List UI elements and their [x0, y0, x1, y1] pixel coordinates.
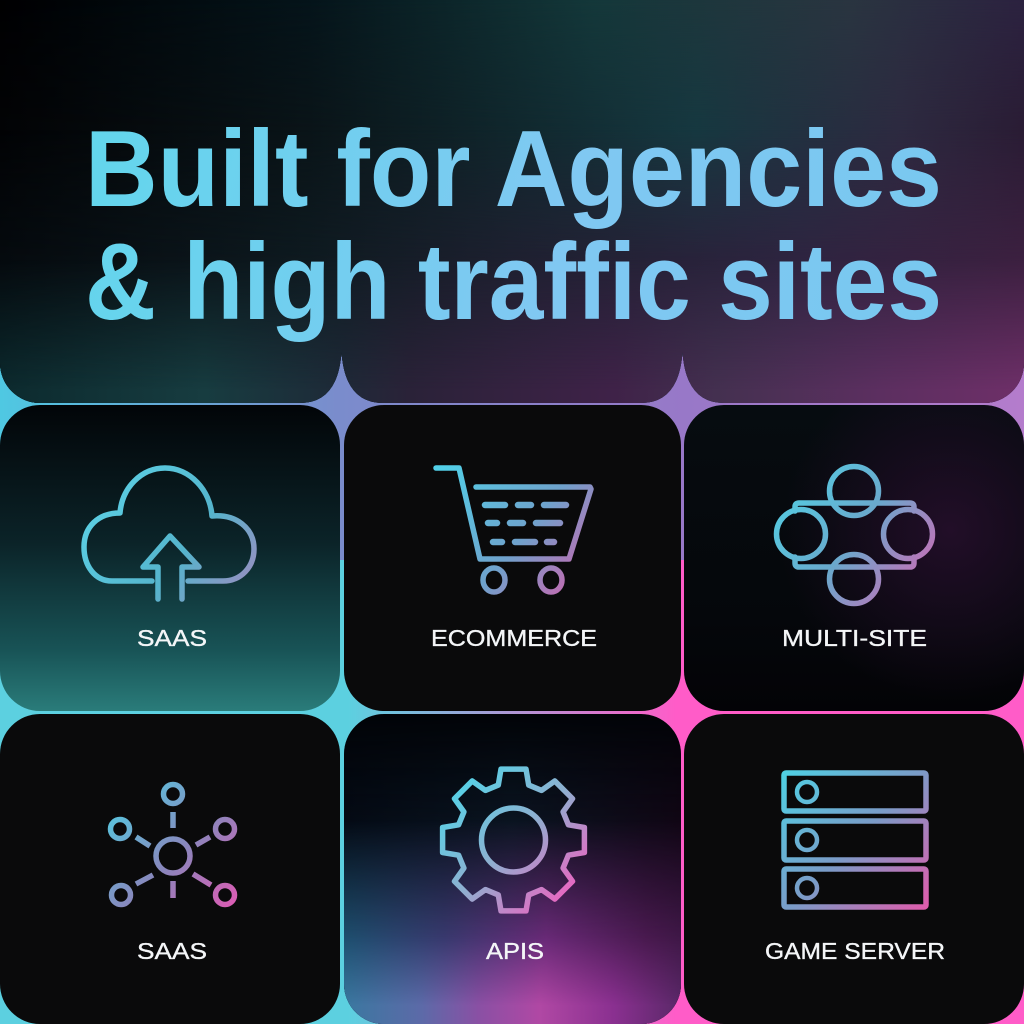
label: MULTI-SITE	[782, 625, 927, 651]
icon: server rack	[784, 773, 926, 907]
title: Built for Agencies	[85, 108, 942, 230]
cart contents	[485, 505, 566, 542]
label: APIS	[486, 938, 544, 964]
panel: SaaS network	[0, 714, 340, 1024]
label: SAAS	[137, 625, 207, 651]
icon: hub network	[110, 784, 234, 904]
card surface	[0, 405, 340, 711]
icon: shopping cart	[436, 468, 591, 592]
panel: SaaS cloud	[0, 405, 340, 711]
panel: header	[0, 0, 1024, 410]
panel: APIs	[344, 714, 681, 1024]
card surface	[344, 405, 681, 711]
panel: Ecommerce	[344, 405, 681, 711]
icon: gear	[443, 769, 584, 911]
card surface	[684, 714, 1024, 1024]
card surface	[0, 714, 340, 1024]
icon: cloud upload	[84, 468, 254, 599]
label: GAME SERVER	[765, 938, 945, 964]
card surface	[684, 405, 1024, 711]
title	[85, 108, 942, 343]
card surface	[344, 714, 681, 1024]
label: SAAS	[137, 938, 207, 964]
label: ECOMMERCE	[431, 625, 597, 651]
panel: Game server	[684, 714, 1024, 1024]
panel: Multi-site	[684, 405, 1024, 711]
title: & high traffic sites	[85, 221, 942, 343]
icon: linked sites	[776, 466, 932, 604]
